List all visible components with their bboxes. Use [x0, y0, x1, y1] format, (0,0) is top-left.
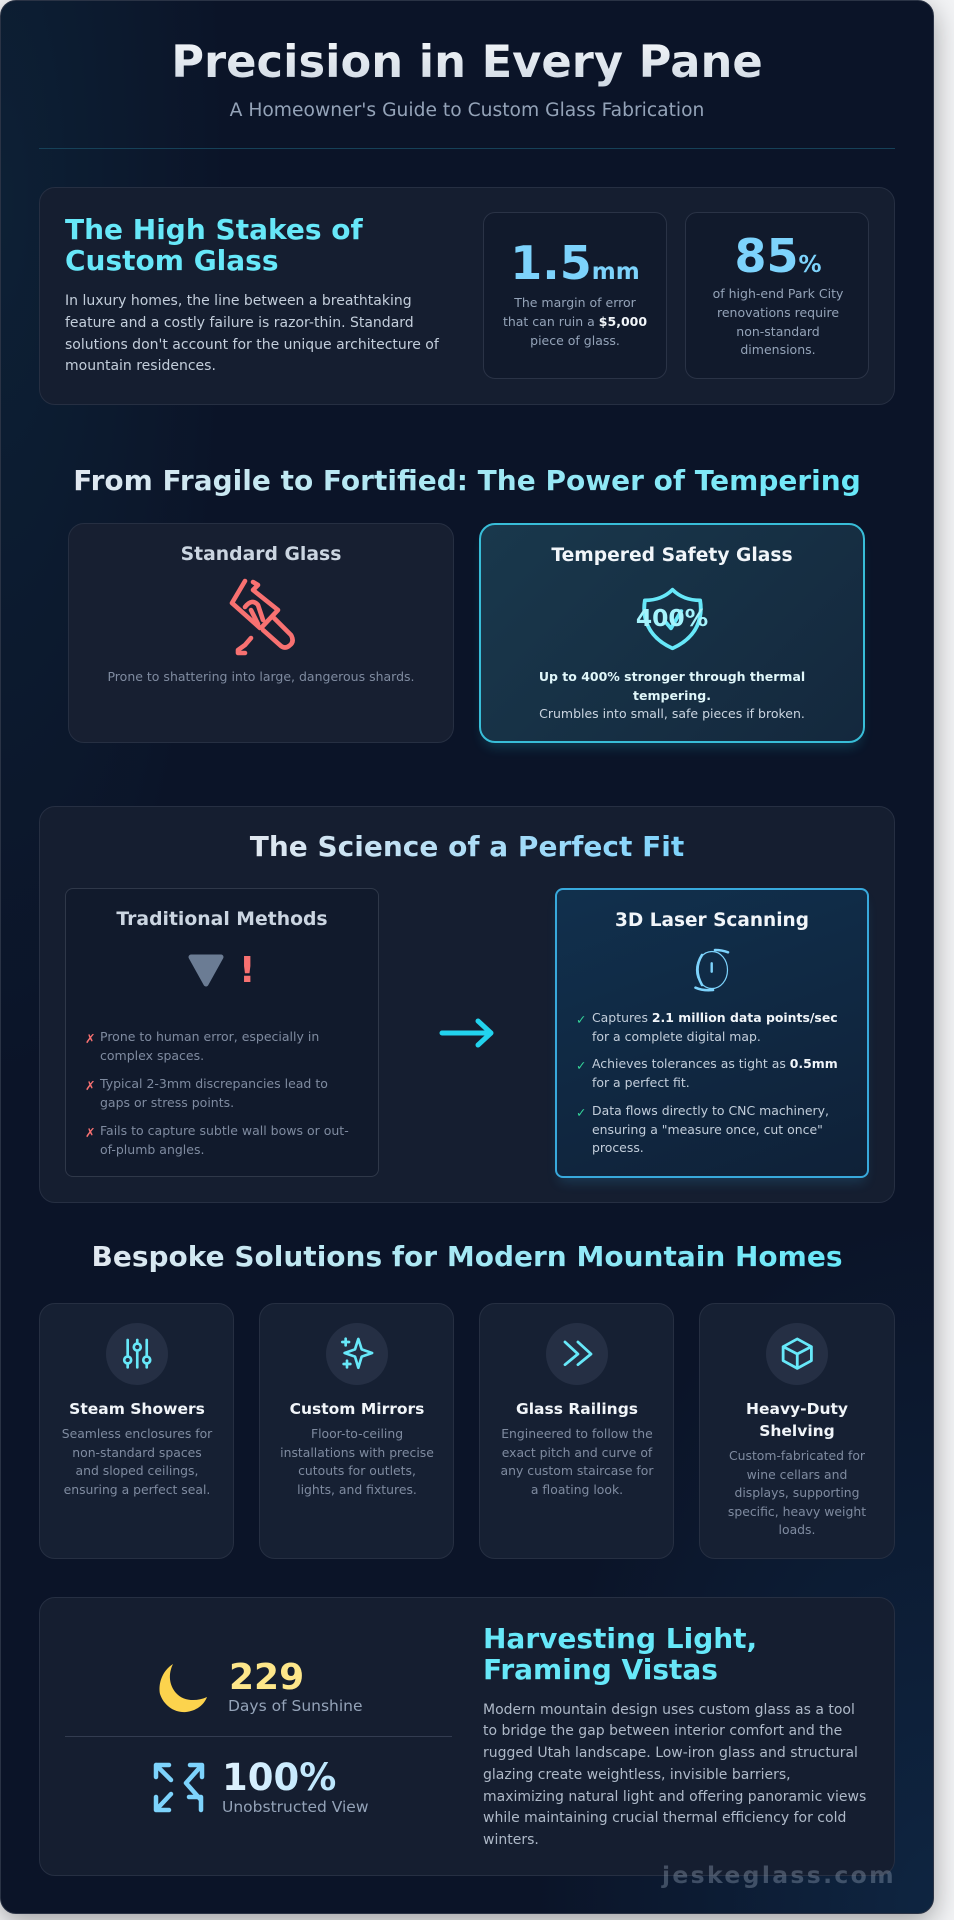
list: laser benefits	[576, 1010, 838, 1155]
panel: custom mirrors	[259, 1303, 454, 1559]
list: laser benefits: for a complete digital map.	[592, 1029, 761, 1044]
panel: the high stakes	[39, 187, 895, 405]
stat text: park city: of high-end Park City	[713, 286, 843, 301]
stat text: park city: renovations require	[717, 305, 839, 320]
heading: bespoke solutions: Bespoke Solutions for Modern Mountain Homes	[91, 1240, 843, 1272]
stat value: 100%: 100%	[222, 1756, 336, 1798]
card text: heavy-duty shelving	[728, 1448, 866, 1537]
stat text: margin of error	[503, 295, 647, 348]
list: traditional drawbacks: Prone to human error, especially in	[100, 1028, 319, 1044]
icon: broken glass	[230, 578, 295, 656]
text: harvesting light body: to bridge the gap between interior comfort and the	[483, 1723, 842, 1739]
text: high stakes body: solutions don't account for the unique architecture of	[65, 337, 439, 353]
icon circle: sliders	[106, 1323, 168, 1385]
list: traditional drawbacks: ✗	[85, 1031, 95, 1046]
icon: sliders	[122, 1338, 152, 1369]
icon: sparkles	[341, 1337, 374, 1370]
icon: cube	[782, 1338, 813, 1370]
text: harvesting light body	[483, 1702, 866, 1848]
heading: harvesting light	[483, 1622, 757, 1686]
stat text: margin of error: The margin of error	[514, 295, 636, 310]
card text: steam showers: ensuring a perfect seal.	[64, 1482, 210, 1497]
card text: steam showers: and sloped ceilings,	[76, 1463, 198, 1478]
stat value: 85%: 85%	[734, 229, 822, 283]
title: Precision in Every Pane	[171, 35, 763, 88]
list: laser benefits: process.	[592, 1140, 644, 1155]
panel: harvesting light	[39, 1597, 895, 1876]
text: harvesting light body: rugged Utah landscape. Low-iron glass and structural	[483, 1745, 858, 1761]
stat value: 229: 229	[229, 1656, 304, 1698]
icon circle: sparkles	[326, 1323, 388, 1385]
stat card: 85%	[685, 212, 869, 379]
heading: high stakes: Custom Glass	[65, 244, 278, 277]
card title: heavy-duty shelving	[746, 1400, 848, 1440]
card title: traditional: Traditional Methods	[116, 908, 328, 930]
stat text: park city: non-standard	[736, 324, 820, 339]
list: laser benefits: for a perfect fit.	[592, 1075, 690, 1090]
card text: heavy-duty shelving: wine cellars and	[747, 1467, 847, 1482]
text: tempered glass: Up to 400% stronger through thermal	[539, 669, 805, 684]
stat label: days of sunshine: Days of Sunshine	[228, 1696, 363, 1714]
heading: high stakes: The High Stakes of	[65, 213, 363, 246]
stat label: unobstructed view: Unobstructed View	[222, 1798, 369, 1816]
text: high stakes body: mountain residences.	[65, 358, 216, 374]
card text: custom mirrors: cutouts for outlets,	[298, 1463, 416, 1478]
card text: heavy-duty shelving: specific, heavy weight	[728, 1504, 866, 1519]
stat value: 1.5mm: 1.5mm	[510, 236, 640, 290]
card text: steam showers	[62, 1426, 212, 1497]
text: harvesting light body: maximizing natural light and offering panoramic views	[483, 1789, 866, 1805]
list: traditional drawbacks: complex spaces.	[100, 1048, 204, 1062]
panel: science of a perfect fit	[39, 806, 895, 1203]
list: traditional drawbacks: of-plumb angles.	[100, 1142, 204, 1156]
arrow	[440, 1018, 494, 1048]
card text: glass railings: exact pitch and curve of	[502, 1445, 652, 1460]
text: high stakes body: feature and a costly failure is razor-thin. Standard	[65, 315, 414, 331]
card title: laser: 3D Laser Scanning	[615, 910, 809, 931]
card title: custom mirrors: Custom Mirrors	[290, 1400, 424, 1418]
icon circle: cube	[766, 1323, 828, 1385]
text: tempered glass: Crumbles into small, safe pieces if broken.	[539, 706, 805, 721]
card title: standard glass: Standard Glass	[181, 544, 341, 565]
panel: tempered glass	[479, 523, 865, 743]
card text: heavy-duty shelving: Custom-fabricated for	[729, 1448, 865, 1463]
header divider	[39, 148, 895, 149]
icon circle: chevrons	[546, 1323, 608, 1385]
list: traditional drawbacks	[85, 1028, 349, 1156]
card text: custom mirrors: lights, and fixtures.	[297, 1482, 417, 1497]
watermark: jeskeglass.com	[662, 1860, 896, 1888]
card text: custom mirrors: installations with precise	[280, 1445, 434, 1460]
card title: heavy-duty shelving: Shelving	[759, 1422, 835, 1440]
heading: harvesting light: Harvesting Light,	[483, 1622, 757, 1655]
panel: 3D laser scanning	[555, 888, 869, 1178]
card text: glass railings: Engineered to follow the	[501, 1426, 653, 1441]
card text: glass railings: any custom staircase for	[501, 1463, 653, 1478]
icon: moon	[159, 1664, 207, 1712]
icon text: 400%: 400%	[636, 604, 708, 632]
icon: tape funnel	[188, 954, 224, 986]
panel: glass railings	[479, 1303, 674, 1559]
card text: custom mirrors: Floor-to-ceiling	[311, 1426, 403, 1441]
card text: steam showers: non-standard spaces	[72, 1445, 202, 1460]
card text: heavy-duty shelving: displays, supporting	[734, 1485, 860, 1500]
list: laser benefits: ✓	[576, 1105, 586, 1120]
text: harvesting light body: while maintaining crucial thermal efficiency for cold	[483, 1810, 846, 1826]
list: laser benefits: ensuring a "measure once, cut once"	[592, 1122, 823, 1137]
stat text: margin of error: piece of glass.	[530, 333, 620, 348]
list: laser benefits: ✓	[576, 1058, 586, 1073]
heading: harvesting light: Framing Vistas	[483, 1653, 718, 1686]
panel: steam showers	[39, 1303, 234, 1559]
text: high stakes body: In luxury homes, the line between a breathtaking	[65, 293, 412, 309]
subtitle: A Homeowner's Guide to Custom Glass Fabrication	[230, 100, 704, 120]
icon: expand arrows	[154, 1762, 204, 1812]
list: laser benefits: Data flows directly to CNC machinery,	[592, 1103, 829, 1118]
card text: custom mirrors	[280, 1426, 434, 1497]
list: traditional drawbacks: ✗	[85, 1078, 95, 1093]
stat divider	[65, 1736, 452, 1737]
icon: shield	[642, 588, 703, 650]
card title: glass railings: Glass Railings	[516, 1400, 638, 1418]
card text: heavy-duty shelving: loads.	[779, 1522, 815, 1537]
stat text: park city	[713, 286, 843, 357]
text: harvesting light body: winters.	[483, 1832, 539, 1848]
list: laser benefits: ✓	[576, 1012, 586, 1027]
heading: high stakes	[65, 213, 363, 277]
list: traditional drawbacks: ✗	[85, 1125, 95, 1140]
stat card: 1.5mm	[483, 212, 667, 379]
heading: tempering: From Fragile to Fortified: The Power of Tempering	[73, 464, 861, 497]
list: traditional drawbacks: Fails to capture subtle wall bows or out-	[100, 1122, 349, 1138]
list: laser benefits: Captures 2.1 million data points/sec	[592, 1010, 838, 1025]
card text: glass railings	[501, 1426, 654, 1497]
card title: heavy-duty shelving: Heavy-Duty	[746, 1400, 848, 1418]
card text: steam showers: Seamless enclosures for	[62, 1426, 212, 1441]
panel: traditional methods	[65, 888, 379, 1177]
text: harvesting light body: Modern mountain design uses custom glass as a tool	[483, 1702, 855, 1718]
stat text: margin of error: that can ruin a $5,000	[503, 314, 647, 329]
card title: steam showers: Steam Showers	[69, 1400, 205, 1418]
list: laser benefits: Achieves tolerances as tight as 0.5mm	[592, 1056, 838, 1071]
heading: science: The Science of a Perfect Fit	[250, 830, 684, 863]
icon: exclamation: !	[239, 950, 255, 991]
stat text: park city: dimensions.	[740, 342, 816, 357]
text: standard glass: Prone to shattering into large, dangerous shards.	[107, 668, 415, 684]
card title: tempered glass: Tempered Safety Glass	[551, 545, 793, 566]
icon: chevrons	[564, 1340, 592, 1366]
card text: glass railings: a floating look.	[531, 1482, 623, 1497]
text: harvesting light body: glazing create weightless, invisible barriers,	[483, 1767, 791, 1783]
text: tempered glass: tempering.	[633, 688, 711, 703]
panel: heavy-duty shelving	[699, 1303, 895, 1559]
text: tempered glass	[539, 669, 805, 721]
text: high stakes body	[65, 293, 440, 374]
icon: scanner	[694, 948, 730, 992]
list: traditional drawbacks: Typical 2-3mm discrepancies lead to	[100, 1076, 328, 1090]
list: traditional drawbacks: gaps or stress points.	[100, 1094, 234, 1110]
panel: standard glass	[68, 523, 454, 743]
